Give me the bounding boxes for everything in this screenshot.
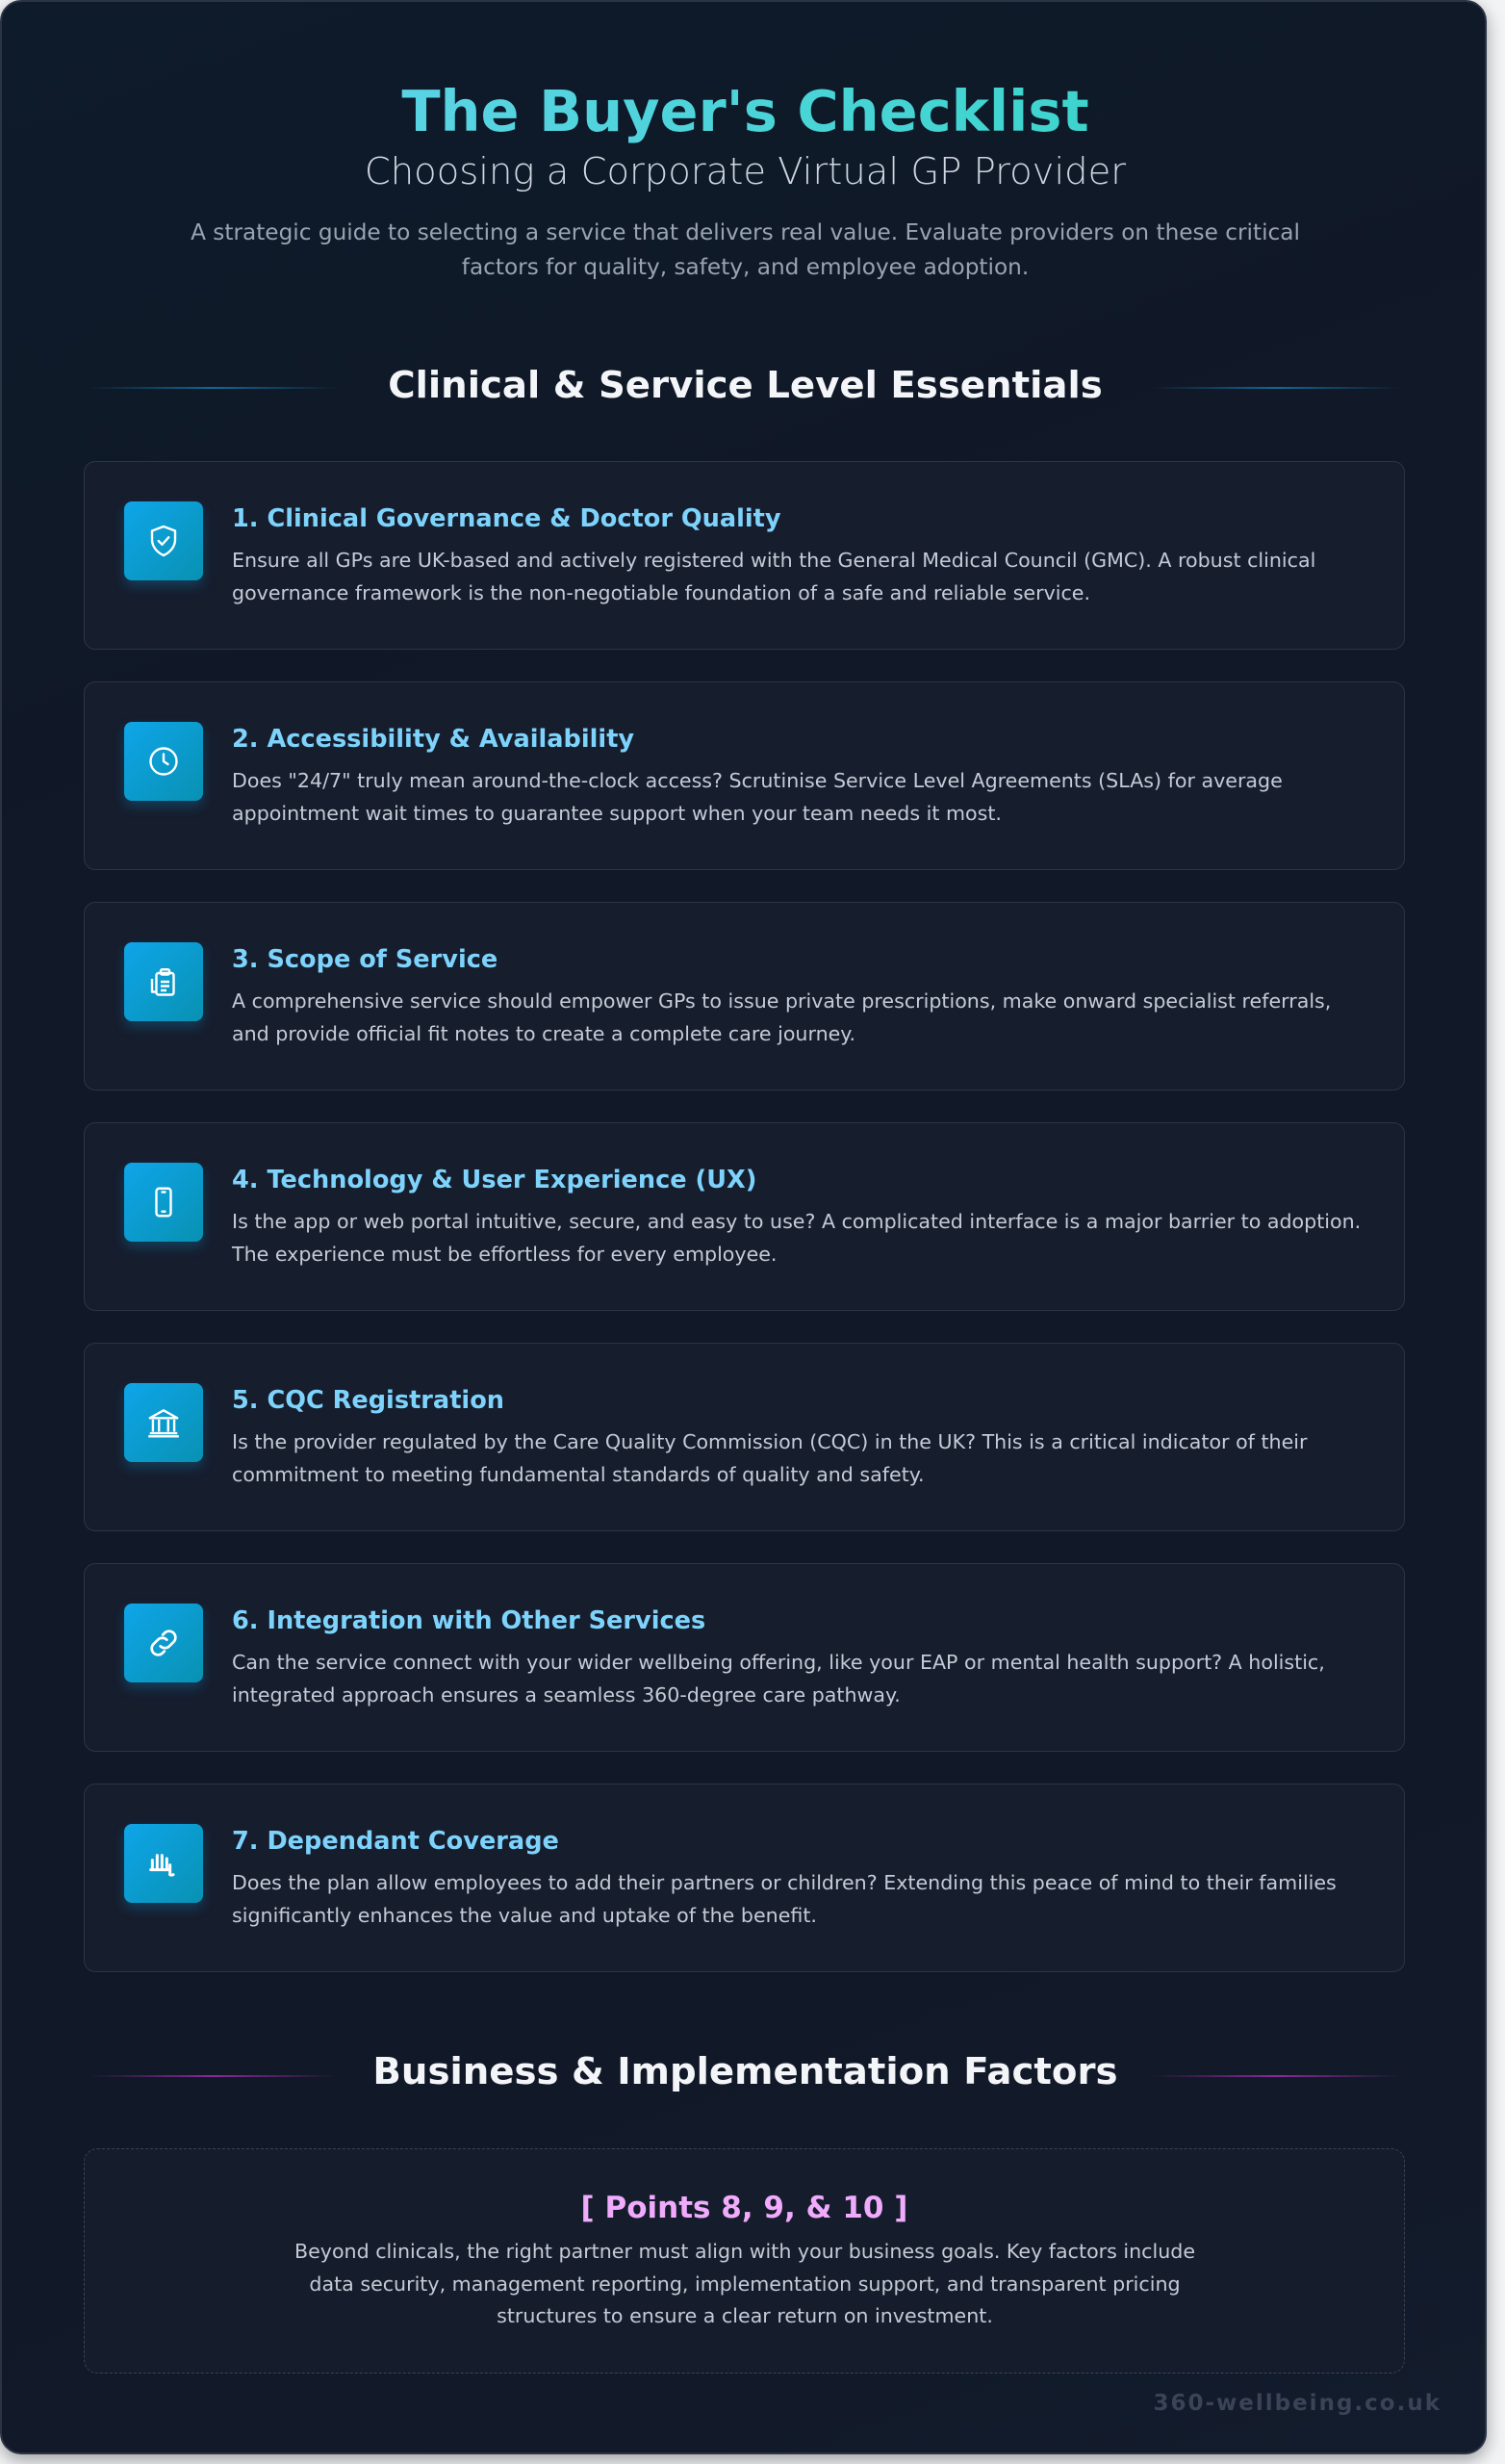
footer url: 360-wellbeing.co.uk bbox=[1153, 2391, 1441, 2416]
title: The Buyer's Checklist bbox=[401, 78, 1089, 144]
card title: 4. Technology & User Experience (UX) bbox=[232, 1166, 756, 1194]
card title: 3. Scope of Service bbox=[232, 945, 497, 974]
card title: 5. CQC Registration bbox=[232, 1386, 504, 1415]
card text: Is the provider regulated by the Care Quality Commission (CQC) in the UK? This is a critical indicator of their commitment to meeting fundamental standards of quality and safety. bbox=[232, 1430, 1307, 1486]
card 2 bbox=[84, 681, 1405, 870]
icon: building bbox=[124, 1383, 203, 1462]
points text: Beyond clinicals, the right partner must align with your business goals. Key factors include data security, management reporting, implementation support, and transparent pricing structures to ensure a clear return on investment. bbox=[294, 2240, 1195, 2327]
card 6 bbox=[84, 1563, 1405, 1752]
intro text: A strategic guide to selecting a service that delivers real value. Evaluate providers on these critical factors for quality, safety, and employee adoption. bbox=[191, 219, 1300, 280]
card text: Ensure all GPs are UK-based and actively registered with the General Medical Council (GMC). A robust clinical governance framework is the non-negotiable foundation of a safe and reliable service. bbox=[232, 549, 1315, 604]
card text: Can the service connect with your wider wellbeing offering, like your EAP or mental health support? A holistic, integrated approach ensures a seamless 360-degree care pathway. bbox=[232, 1651, 1325, 1707]
card text: A comprehensive service should empower GPs to issue private prescriptions, make onward specialist referrals, and provide official fit notes to create a complete care journey. bbox=[232, 989, 1331, 1045]
points heading: [ Points 8, 9, & 10 ] bbox=[581, 2191, 907, 2225]
card title: 1. Clinical Governance & Doctor Quality bbox=[232, 504, 781, 533]
icon: clock bbox=[124, 722, 203, 801]
icon: phone bbox=[124, 1163, 203, 1242]
card text: Does "24/7" truly mean around-the-clock access? Scrutinise Service Level Agreements (SLAs) for average appointment wait times to guarantee support when your team needs it most. bbox=[232, 769, 1283, 825]
icon: clipboard bbox=[124, 942, 203, 1021]
card 1 bbox=[84, 461, 1405, 650]
card 5 bbox=[84, 1343, 1405, 1531]
icon: hand bbox=[124, 1824, 203, 1903]
title bbox=[2, 75, 1489, 148]
icon: link bbox=[124, 1604, 203, 1682]
card text: Does the plan allow employees to add their partners or children? Extending this peace of mind to their families significantly enhances the value and uptake of the benefit. bbox=[232, 1871, 1337, 1927]
card 3 bbox=[84, 902, 1405, 1091]
card text: Is the app or web portal intuitive, secure, and easy to use? A complicated interface is a major barrier to adoption. The experience must be effortless for every employee. bbox=[232, 1210, 1361, 1266]
section heading: clinical: Clinical & Service Level Essentials bbox=[388, 364, 1103, 407]
card 7 bbox=[84, 1784, 1405, 1972]
card 4 bbox=[84, 1122, 1405, 1311]
panel: business factors bbox=[84, 2148, 1405, 2374]
icon: shield bbox=[124, 501, 203, 580]
card title: 7. Dependant Coverage bbox=[232, 1827, 559, 1856]
subtitle: Choosing a Corporate Virtual GP Provider bbox=[365, 150, 1126, 193]
section heading: business: Business & Implementation Factors bbox=[372, 2050, 1118, 2093]
card title: 2. Accessibility & Availability bbox=[232, 725, 634, 754]
card title: 6. Integration with Other Services bbox=[232, 1606, 705, 1635]
